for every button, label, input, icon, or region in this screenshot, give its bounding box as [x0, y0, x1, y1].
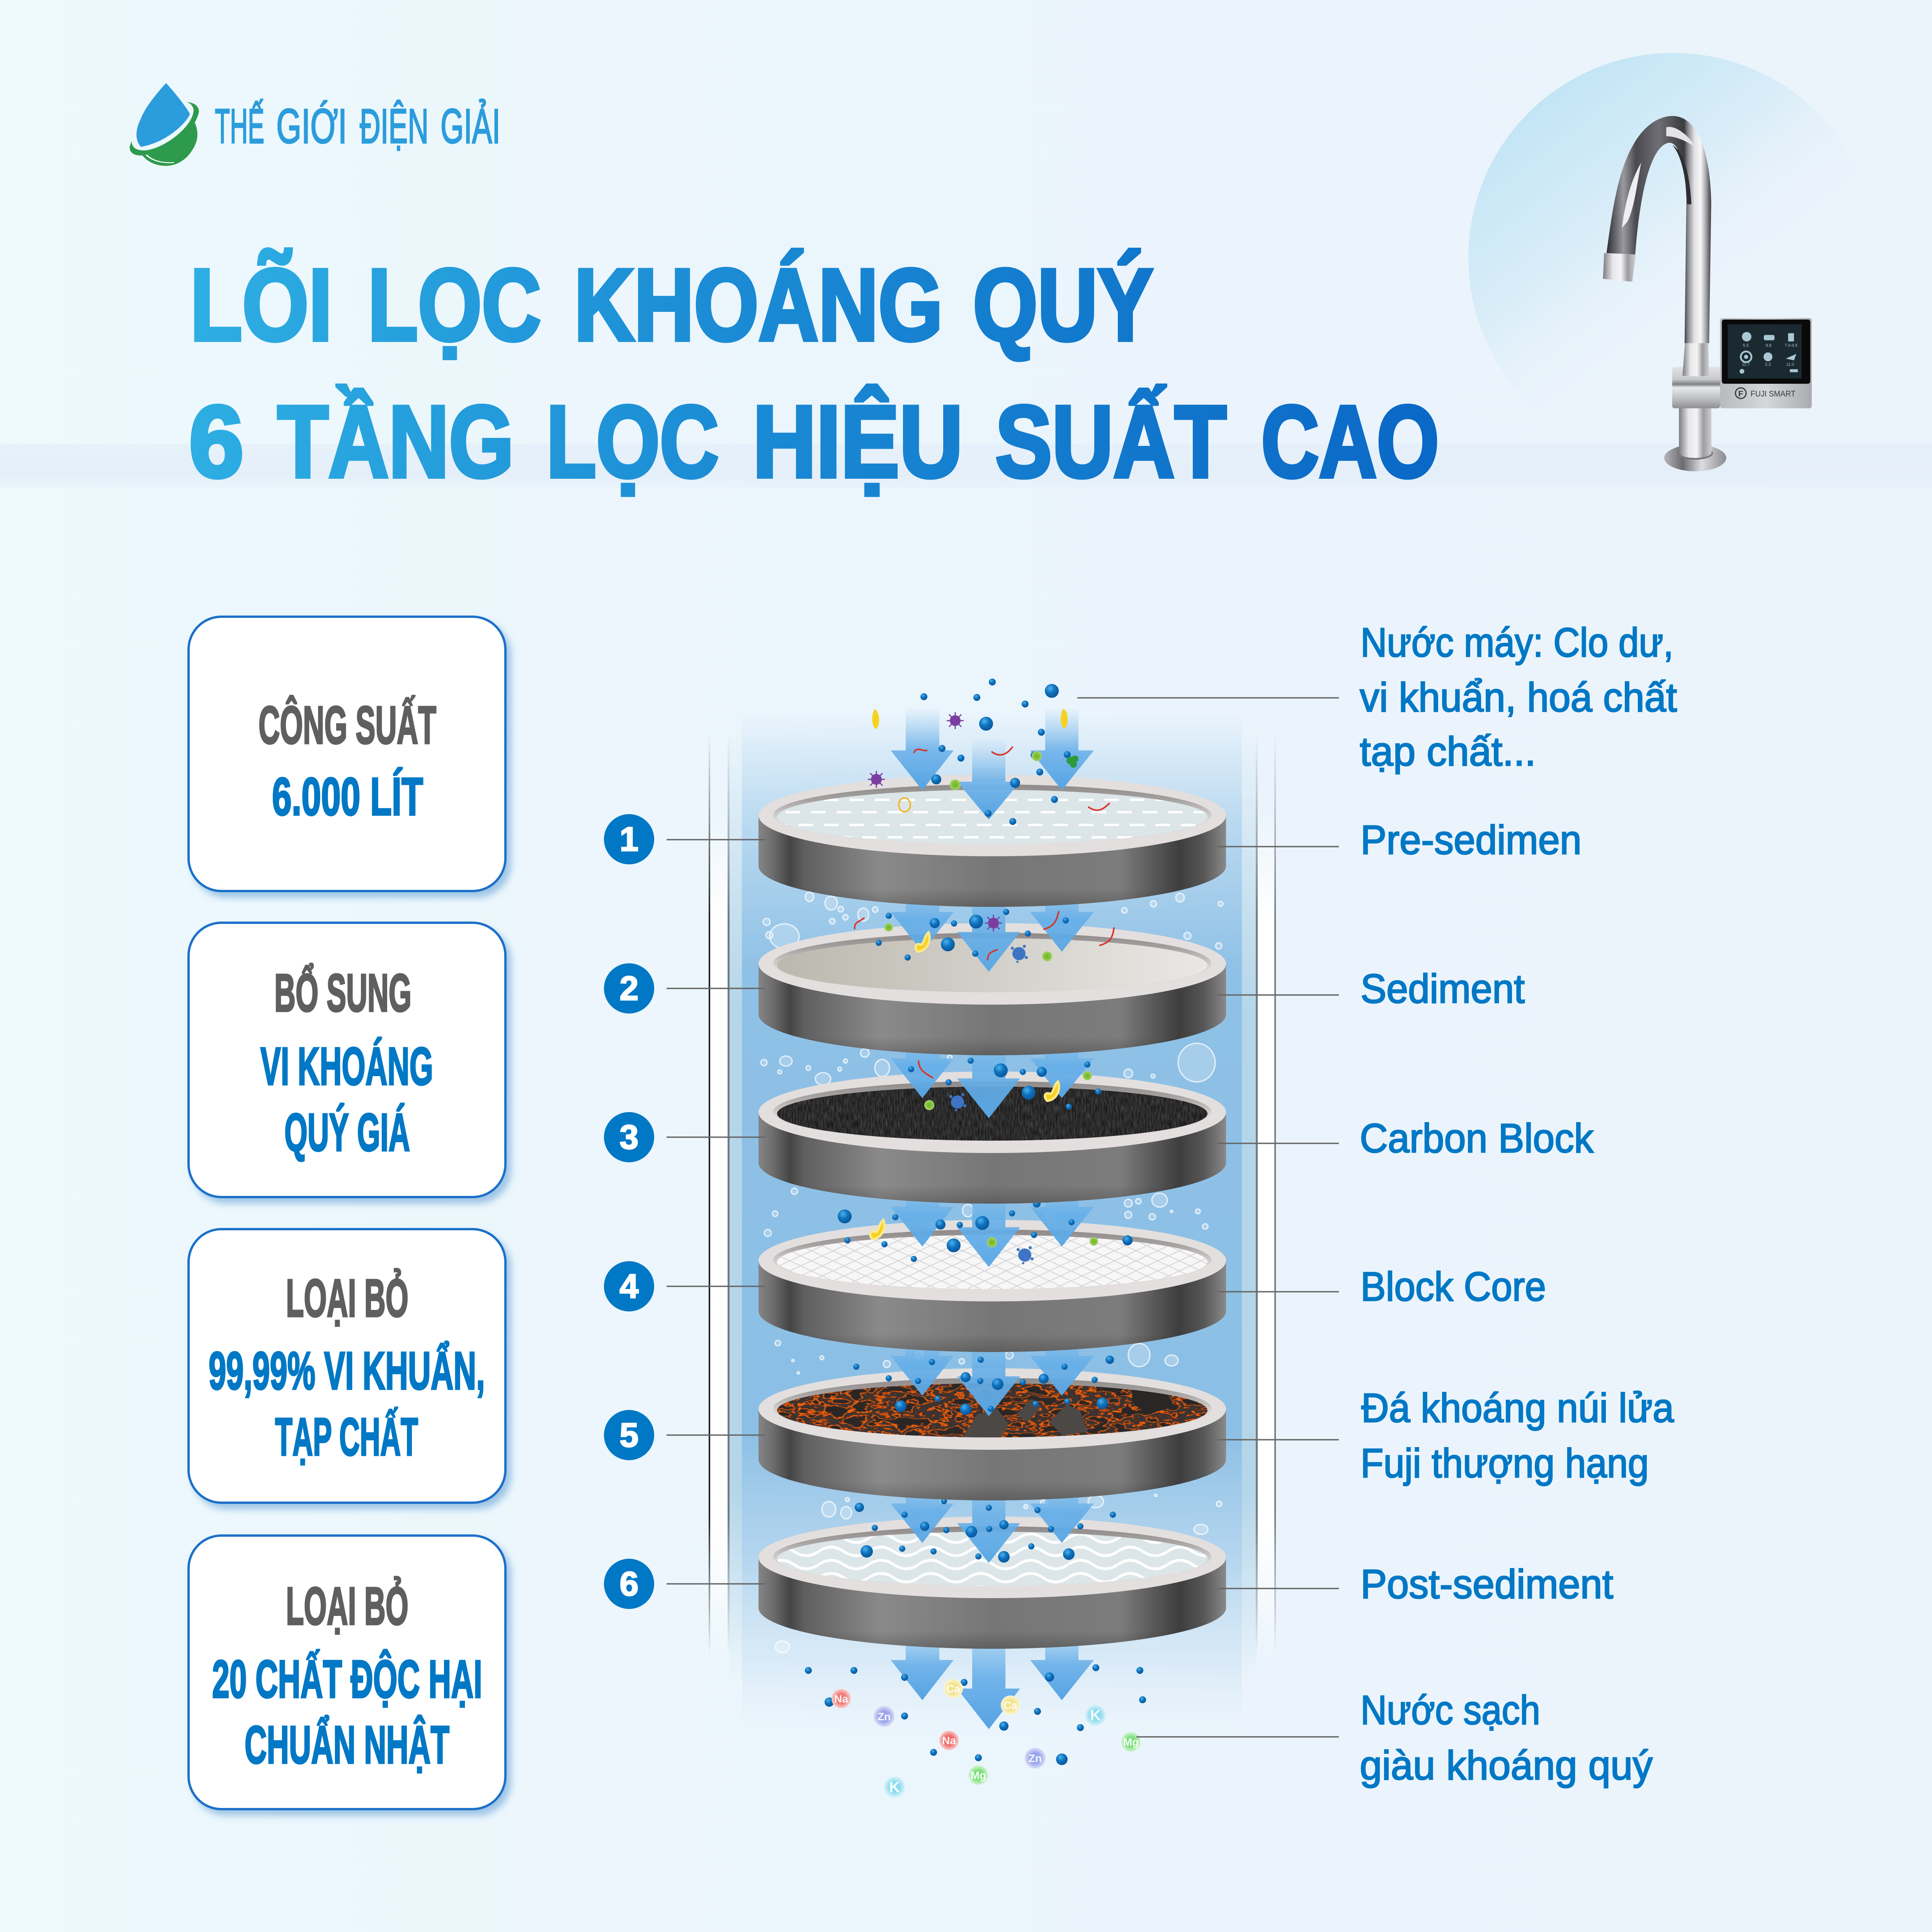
title line 2: 6 [189, 384, 244, 498]
faucet aerator [1603, 253, 1636, 282]
card: loại bỏ 99,99% vi khuẩn, tạp chất: TẠP CHẤT [275, 1407, 418, 1467]
title line 2: SUẤT [995, 384, 1226, 498]
display values: 9.8 [1766, 343, 1772, 348]
mineral: Zn: Zn [1029, 1752, 1042, 1764]
title line 1: LÕI [190, 248, 332, 362]
logo wordmark [215, 99, 500, 153]
badge 4 [604, 1261, 654, 1311]
card: bổ sung vi khoáng quý giá [189, 923, 505, 1197]
mineral: Ca [944, 1679, 963, 1698]
faucet collar [1682, 343, 1709, 376]
card: loại bỏ 99,99% vi khuẩn, tạp chất [189, 1229, 505, 1503]
display values: 2.3 [1765, 362, 1771, 367]
title line 1: LỌC [368, 248, 541, 362]
faucet base [1664, 445, 1726, 471]
display values [1742, 343, 1798, 367]
title [189, 248, 1439, 498]
mineral: Zn [1025, 1748, 1046, 1769]
brand mark: FUJI SMART [1750, 389, 1796, 398]
right labels [1360, 620, 1677, 1788]
label: volcanic stone: Đá khoáng núi lửa [1361, 1385, 1674, 1431]
card: loại bỏ 99,99% vi khuẩn, tạp chất: 99,99% VI KHUẨN, [209, 1341, 485, 1401]
badge 2 [604, 963, 654, 1014]
faucet cross body [1672, 367, 1720, 408]
filter layer 5: volcanic mineral stone [759, 1345, 1226, 1500]
card: loại bỏ 20 chất độc hại chuẩn nhật: CHUẨN NHẬT [245, 1715, 449, 1775]
mineral: Na [832, 1689, 851, 1708]
label: post-sediment: Post-sediment [1361, 1561, 1613, 1607]
numbered badges and leader lines [604, 698, 1339, 1737]
label: clean water [1360, 1687, 1653, 1788]
title line 2: LỌC [546, 384, 719, 498]
label: pre-sedimen: Pre-sedimen [1361, 817, 1582, 863]
label: clean water: giàu khoáng quý [1360, 1743, 1653, 1788]
water bubbles [761, 892, 1223, 1653]
filter layer 6: post-sediment [759, 1493, 1226, 1649]
faucet spout [1607, 116, 1711, 343]
display icons [1740, 332, 1798, 374]
mineral: Na [939, 1731, 959, 1750]
badge 1: 1 [620, 820, 638, 858]
badge 1 [604, 814, 654, 864]
brand mark [1735, 388, 1796, 398]
filter layer 1: pre-sediment [759, 679, 1226, 907]
badge 5 [604, 1410, 654, 1460]
logo wordmark: THẾ [215, 99, 264, 153]
label: clean water: Nước sạch [1361, 1687, 1540, 1733]
mineral: Ca: Ca [1003, 1699, 1017, 1711]
mineral: Zn: Zn [878, 1711, 891, 1723]
card: công suất 6.000 lít: 6.000 LÍT [272, 767, 423, 827]
card: công suất 6.000 lít [189, 617, 505, 891]
title line 2: CAO [1261, 384, 1439, 498]
label: tap water: vi khuẩn, hoá chất [1360, 675, 1677, 720]
mineral: Mg [1121, 1732, 1141, 1752]
label: sediment: Sediment [1361, 966, 1525, 1012]
display values: 7.0-9.5 [1785, 343, 1798, 348]
card: loại bỏ 20 chất độc hại chuẩn nhật: 20 CHẤT ĐỘC HẠI [212, 1650, 482, 1709]
display values: 11.0 [1786, 362, 1794, 367]
title line 2: TẦNG [277, 384, 514, 498]
brand mark: F [1738, 389, 1743, 398]
icon: water drop and green globe [130, 83, 199, 166]
badge 3 [604, 1112, 654, 1162]
arrows: clean water out [891, 1642, 1094, 1729]
label: tap water [1360, 620, 1677, 774]
label: block core: Block Core [1361, 1264, 1546, 1310]
horizontal background band [0, 444, 1932, 488]
info cards [189, 617, 505, 1809]
mineral: K: K [889, 1779, 900, 1796]
title line 2 [189, 384, 1439, 498]
title line 2: HIỆU [753, 384, 963, 498]
card: loại bỏ 20 chất độc hại chuẩn nhật: LOẠI BỎ [286, 1577, 408, 1636]
logo wordmark: GIỚI [276, 99, 347, 153]
badge 4: 4 [620, 1267, 639, 1305]
logo: Thế Giới Điện Giải [130, 83, 500, 166]
card: bổ sung vi khoáng quý giá: QUÝ GIÁ [284, 1103, 410, 1162]
label: volcanic stone [1361, 1385, 1674, 1486]
faucet product image [1603, 116, 1812, 471]
card: bổ sung vi khoáng quý giá: VI KHOÁNG [260, 1037, 433, 1096]
card: công suất 6.000 lít: CÔNG SUẤT [259, 696, 436, 755]
label: tap water: tạp chất... [1360, 729, 1536, 774]
faucet stem [1679, 407, 1711, 458]
badge 2: 2 [620, 969, 638, 1007]
card: loại bỏ 20 chất độc hại chuẩn nhật [189, 1536, 505, 1809]
water channel background [709, 711, 1276, 1739]
mineral: Ca: Ca [946, 1683, 960, 1695]
logo wordmark: ĐIỆN [360, 99, 429, 153]
filter layer 3: carbon block [759, 1047, 1226, 1204]
mineral: K [884, 1777, 905, 1798]
label: volcanic stone: Fuji thượng hạng [1361, 1440, 1649, 1486]
mineral: K: K [1090, 1708, 1101, 1724]
badge 5: 5 [620, 1416, 638, 1454]
mineral: Na: Na [942, 1735, 956, 1747]
mineral: Zn [874, 1706, 895, 1727]
title line 1 [190, 248, 1153, 362]
card: bổ sung vi khoáng quý giá: BỔ SUNG [274, 963, 412, 1023]
display values: 5.5 [1743, 343, 1749, 348]
mineral: Mg [969, 1765, 988, 1785]
display values: 11.7 [1742, 362, 1750, 367]
badge 3: 3 [620, 1118, 638, 1156]
logo wordmark: GIẢI [440, 99, 500, 153]
decorative circle behind faucet [1468, 53, 1878, 463]
badge 6: 6 [620, 1565, 638, 1603]
title line 1: KHOÁNG [574, 248, 943, 362]
mineral: Na: Na [834, 1693, 848, 1705]
filter layer 4: block core [759, 1196, 1226, 1352]
mineral: Mg: Mg [1123, 1736, 1139, 1748]
badge 6 [604, 1559, 654, 1609]
label: carbon block: Carbon Block [1360, 1116, 1594, 1161]
output arrows and minerals [805, 1642, 1146, 1798]
label: tap water: Nước máy: Clo dư, [1361, 620, 1673, 665]
filter layer 2: sediment [759, 900, 1226, 1055]
mineral: Mg: Mg [971, 1769, 986, 1781]
card: loại bỏ 99,99% vi khuẩn, tạp chất: LOẠI BỎ [286, 1269, 408, 1328]
water particles [920, 679, 1071, 825]
mineral: Ca [1001, 1696, 1020, 1715]
title line 1: QUÝ [973, 248, 1153, 362]
contaminants [868, 709, 1110, 812]
mineral: K [1085, 1705, 1106, 1726]
small water particles [805, 1664, 1146, 1765]
faucet housing with display [1720, 318, 1812, 408]
